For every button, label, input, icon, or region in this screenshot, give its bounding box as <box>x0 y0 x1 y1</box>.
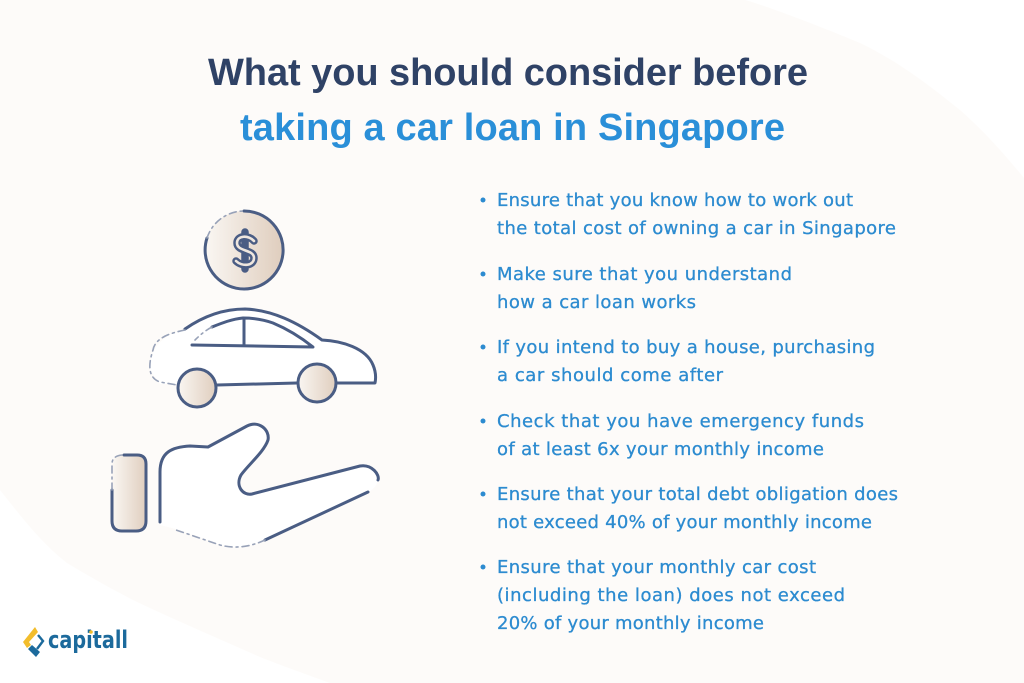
item 1 <box>480 190 896 239</box>
item 2: Make sure that you understand <box>497 264 792 285</box>
item 5 <box>480 484 898 533</box>
logo: capitall <box>23 626 128 657</box>
item 5: not exceed 40% of your monthly income <box>497 512 872 533</box>
item 6: Ensure that your monthly car cost <box>497 557 816 578</box>
item 5: Ensure that your total debt obligation does <box>497 484 898 505</box>
wheel: front <box>297 363 337 403</box>
title <box>208 52 808 149</box>
wheel: rear <box>177 368 217 408</box>
illustration: hand holding car and coin <box>112 211 378 547</box>
icon: dollar coin <box>205 211 283 289</box>
item 3: If you intend to buy a house, purchasing <box>497 337 875 358</box>
icon: hand <box>160 424 378 547</box>
title: taking a car loan in Singapore <box>240 107 785 149</box>
icon: car <box>150 309 376 408</box>
item 4: of at least 6x your monthly income <box>497 439 824 460</box>
item 4: Check that you have emergency funds <box>497 411 864 432</box>
bullet list <box>480 190 898 634</box>
item 6 <box>480 557 845 634</box>
item 6: 20% of your monthly income <box>497 613 764 634</box>
item 3 <box>480 337 875 386</box>
item 4 <box>480 411 864 460</box>
item 2 <box>480 264 792 313</box>
item 2: how a car loan works <box>497 292 696 313</box>
logo: capitall: capitall <box>48 626 128 654</box>
item 6: (including the loan) does not exceed <box>497 585 845 606</box>
title: What you should consider before <box>208 52 808 94</box>
item 1: the total cost of owning a car in Singapore <box>497 218 896 239</box>
item 3: a car should come after <box>497 365 724 386</box>
item 1: Ensure that you know how to work out <box>497 190 853 211</box>
icon: sleeve <box>112 455 147 531</box>
